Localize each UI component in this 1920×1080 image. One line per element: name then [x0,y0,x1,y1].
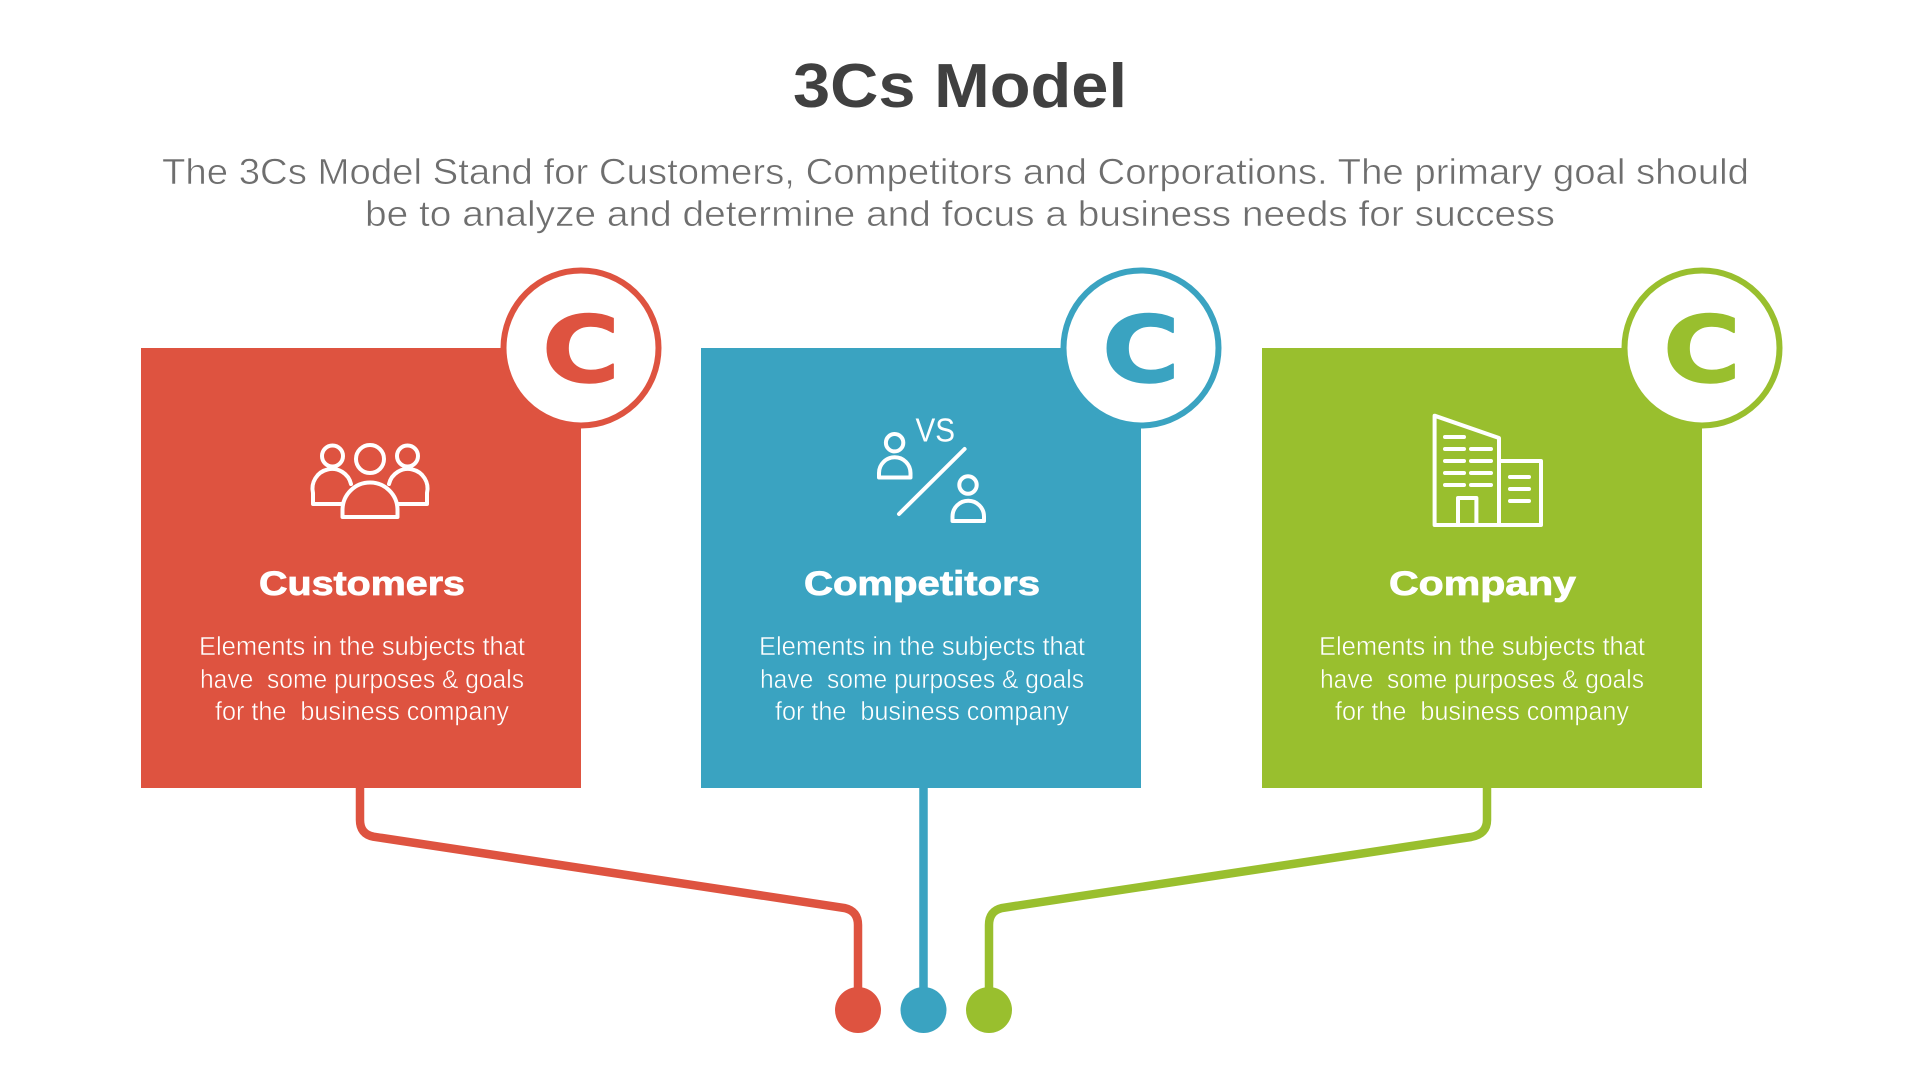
panel: competitors [701,270,1218,788]
subtitle text block [162,151,1749,234]
description: competitors [759,633,1085,726]
badge: letter C [504,270,658,426]
description: company: have some purposes & goals [1320,666,1644,694]
icon: person versus person [879,412,984,521]
connector: competitors line and dot [900,785,946,1033]
heading: competitors: Competitors [804,565,1040,603]
badge: letter C [1064,270,1218,426]
description: customers: for the business company [215,698,509,726]
description: customers: have some purposes & goals [200,666,524,694]
badge: letter C: C [542,297,620,404]
badge: letter C: C [1663,297,1741,404]
card background [141,348,581,788]
panel: customers [141,270,658,788]
connector: customers line and dot [360,785,881,1033]
icon: group of people [312,445,428,517]
icon: office buildings [1435,416,1541,525]
card background [1262,348,1702,788]
description: competitors: Elements in the subjects that [759,633,1085,661]
subtitle text block: be to analyze and determine and focus a business needs for success [365,193,1555,234]
heading: customers: Customers [259,565,465,603]
card background [701,348,1141,788]
badge: letter C: C [1102,297,1180,404]
description: customers: Elements in the subjects that [199,633,525,661]
description: company: for the business company [1335,698,1629,726]
panel: company [1262,270,1780,788]
badge: letter C [1624,270,1780,426]
description: competitors: for the business company [775,698,1069,726]
subtitle text block: The 3Cs Model Stand for Customers, Competitors and Corporations. The primary goal should [162,151,1749,192]
description: company: Elements in the subjects that [1319,633,1645,661]
description: company [1319,633,1645,726]
connector: company line and dot [966,785,1487,1033]
icon: person versus person: VS [916,412,955,448]
title: 3Cs Model [793,52,1127,121]
description: competitors: have some purposes & goals [760,666,1084,694]
heading: company: Company [1389,565,1576,603]
description: customers [199,633,525,726]
